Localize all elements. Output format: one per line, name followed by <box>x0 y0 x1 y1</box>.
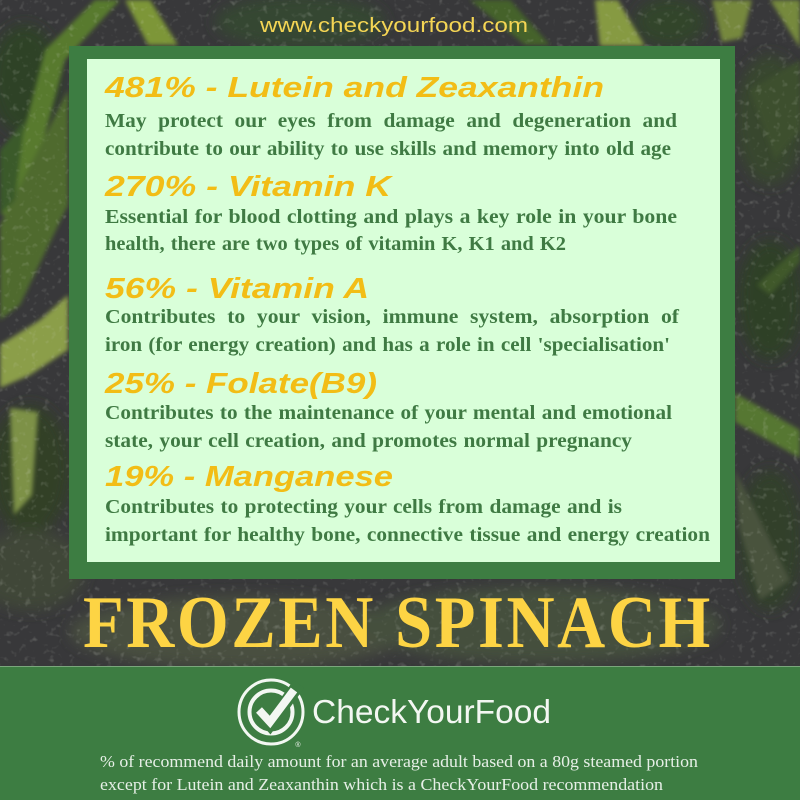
icon: check mark badge <box>239 680 303 749</box>
nutrient: lutein and zeaxanthin: contribute to our ability to use skills and memory into old age <box>105 138 671 160</box>
nutrient: vitamin k: 270% - Vitamin K <box>104 171 394 203</box>
nutrient: vitamin k <box>104 171 677 255</box>
panel frame <box>69 46 735 579</box>
nutrient: vitamin a: iron (for energy creation) and has a role in cell 'specialisation' <box>105 334 670 356</box>
nutrient: lutein and zeaxanthin: 481% - Lutein and Zeaxanthin <box>104 72 604 104</box>
footer band <box>0 666 800 800</box>
panel inner background <box>87 59 720 562</box>
logo: CheckYourFood <box>239 680 551 749</box>
nutrient: folate: 25% - Folate(B9) <box>104 368 377 400</box>
icon: check mark badge: ® <box>295 741 301 749</box>
footnote <box>100 752 698 794</box>
nutrient: lutein and zeaxanthin: May protect our eyes from damage and degeneration and <box>105 110 678 132</box>
logo wordmark: CheckYourFood <box>312 693 551 730</box>
footnote: except for Lutein and Zeaxanthin which is a CheckYourFood recommendation <box>100 775 663 794</box>
panel: nutrients <box>69 46 735 579</box>
nutrient: vitamin k: health, there are two types of vitamin K, K1 and K2 <box>105 233 566 255</box>
nutrient: vitamin k: Essential for blood clotting and plays a key role in your bone <box>105 206 677 228</box>
title: FROZEN SPINACH <box>83 582 710 664</box>
nutrient: manganese <box>105 461 711 546</box>
nutrient: vitamin a <box>105 273 680 356</box>
nutrient: vitamin a: Contributes to your vision, immune system, absorption of <box>105 306 680 328</box>
nutrient: folate: state, your cell creation, and promotes normal pregnancy <box>105 430 633 452</box>
footnote: % of recommend daily amount for an average adult based on a 80g steamed portion <box>100 752 698 771</box>
nutrient: manganese: Contributes to protecting your cells from damage and is <box>105 496 622 518</box>
top website address: www.checkyourfood.com <box>259 15 528 37</box>
nutrient: vitamin a: 56% - Vitamin A <box>105 273 369 305</box>
nutrient: manganese: 19% - Manganese <box>105 461 393 493</box>
nutrient: manganese: important for healthy bone, connective tissue and energy creation <box>105 524 711 546</box>
nutrient: folate: Contributes to the maintenance of your mental and emotional <box>105 402 672 424</box>
nutrient: folate <box>104 368 672 452</box>
nutrient: lutein and zeaxanthin <box>104 72 678 160</box>
